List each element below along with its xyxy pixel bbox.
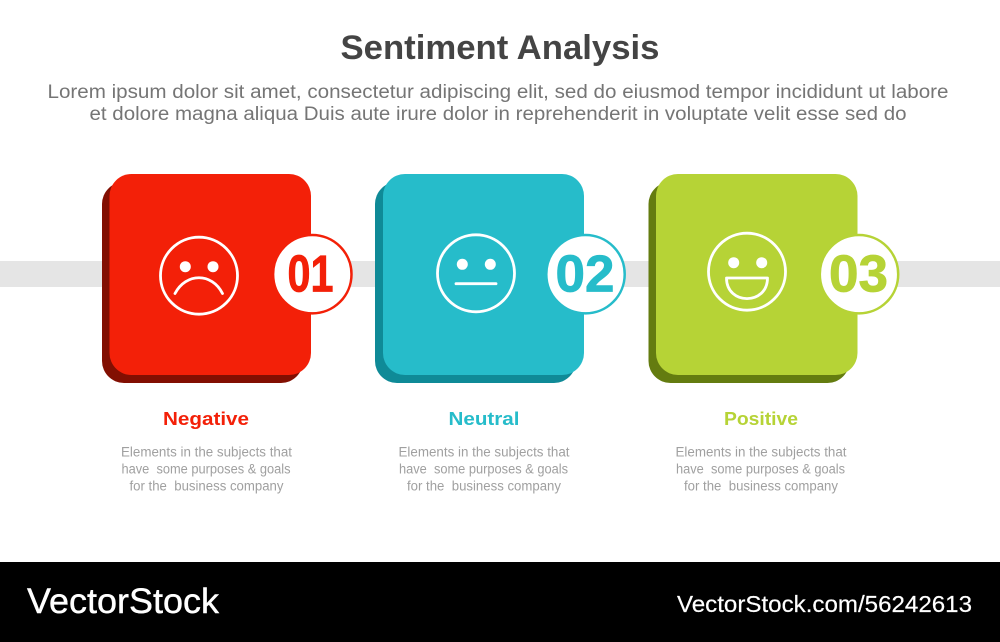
number badge: 03 xyxy=(820,235,898,313)
card: positive xyxy=(656,174,858,375)
card shadow: negative xyxy=(102,182,303,383)
description: negative: have some purposes & goals xyxy=(122,462,291,476)
description: neutral xyxy=(398,444,570,494)
footer url: VectorStock.com/56242613 xyxy=(677,591,972,617)
connector band xyxy=(0,261,1000,287)
number badge: 01: 01 xyxy=(288,246,334,304)
panel: positive xyxy=(648,174,898,494)
icon: happy face xyxy=(708,233,786,310)
subtitle text: et dolore magna aliqua Duis aute irure dolor in reprehenderit in voluptate velit esse sed do xyxy=(90,104,906,125)
description: negative: for the business company xyxy=(130,478,284,494)
footer bar xyxy=(0,562,1000,642)
description: positive: have some purposes & goals xyxy=(676,462,845,476)
description: neutral: have some purposes & goals xyxy=(399,462,568,476)
label: neutral: Neutral xyxy=(448,408,520,429)
subtitle text: Lorem ipsum dolor sit amet, consectetur adipiscing elit, sed do eiusmod tempor incididunt ut labore xyxy=(48,82,948,103)
description: negative: Elements in the subjects that xyxy=(121,444,292,460)
description: positive: for the business company xyxy=(684,478,838,494)
title: Sentiment Analysis xyxy=(340,29,660,67)
card shadow: positive xyxy=(648,182,850,383)
subtitle text xyxy=(48,82,948,125)
footer logo: VectorStock xyxy=(27,582,220,621)
card: neutral xyxy=(383,174,584,375)
number badge: 01 xyxy=(273,235,351,313)
icon: sad face xyxy=(160,237,238,314)
panel: neutral xyxy=(375,174,625,494)
card: negative xyxy=(110,174,311,375)
panel: negative xyxy=(102,174,351,494)
description: positive xyxy=(676,444,847,494)
number badge: 03: 03 xyxy=(829,246,888,304)
label: positive: Positive xyxy=(724,408,798,429)
description: neutral: Elements in the subjects that xyxy=(398,444,570,460)
card shadow: neutral xyxy=(375,182,576,383)
icon: neutral face xyxy=(438,235,514,312)
label: negative: Negative xyxy=(163,408,249,429)
description: positive: Elements in the subjects that xyxy=(676,444,847,460)
description: negative xyxy=(121,444,292,494)
number badge: 02: 02 xyxy=(556,246,614,304)
number badge: 02 xyxy=(546,235,625,313)
description: neutral: for the business company xyxy=(407,478,561,494)
